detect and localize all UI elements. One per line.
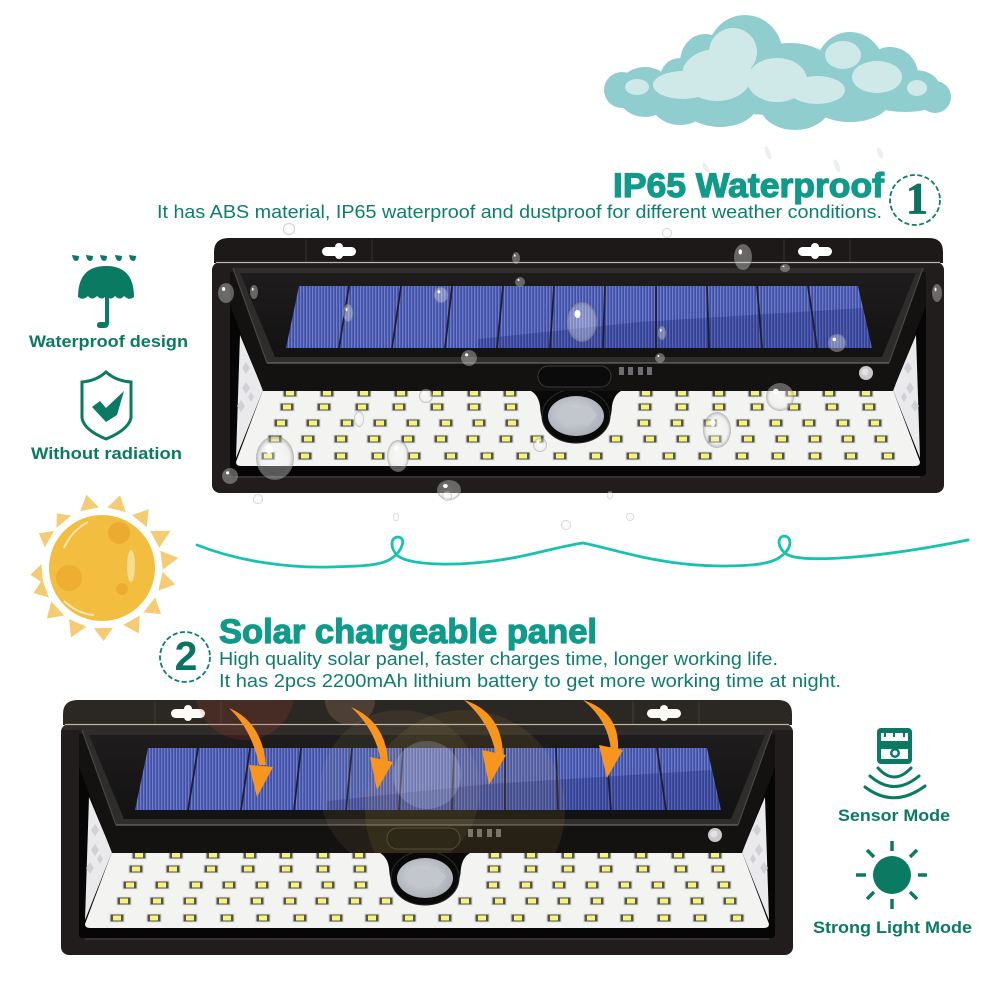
badge: number 1: 1 xyxy=(906,174,928,223)
icon: strong light sun xyxy=(856,841,927,909)
label: Without radiation: Without radiation xyxy=(31,444,182,463)
rain streaks under cloud xyxy=(701,146,884,174)
label: Sensor Mode: Sensor Mode xyxy=(838,806,950,825)
product: lamp with sunlight xyxy=(61,700,793,955)
decorative teal squiggle xyxy=(197,536,968,567)
icon: sensor xyxy=(865,728,925,798)
lens flare xyxy=(63,700,792,853)
product: lamp with water drops xyxy=(212,223,944,530)
icon: umbrella with rain xyxy=(72,255,136,328)
badge: number 1 xyxy=(890,174,940,225)
sun illustration xyxy=(29,493,180,641)
water drops on lamp xyxy=(218,223,942,530)
subtext: solar panel description: It has 2pcs 2200mAh lithium battery to get more working time at night. xyxy=(219,671,841,691)
sun rays xyxy=(29,493,180,641)
badge: number 2: 2 xyxy=(175,633,197,679)
label: Strong Light Mode: Strong Light Mode xyxy=(813,918,972,937)
subtext: IP65 description: It has ABS material, IP65 waterproof and dustproof for different weather conditions. xyxy=(157,202,882,222)
sunlight arrows xyxy=(229,700,623,797)
cloud xyxy=(604,15,951,130)
label: Waterproof design: Waterproof design xyxy=(29,332,188,351)
badge: number 2 xyxy=(160,632,210,682)
heading: IP65 Waterproof: IP65 Waterproof xyxy=(613,167,885,205)
icon: shield with check xyxy=(82,372,131,439)
heading: Solar chargeable panel: Solar chargeable panel xyxy=(219,613,597,651)
subtext: solar panel description: High quality solar panel, faster charges time, longer working life. xyxy=(219,649,778,669)
subtext: solar panel description xyxy=(219,649,841,691)
